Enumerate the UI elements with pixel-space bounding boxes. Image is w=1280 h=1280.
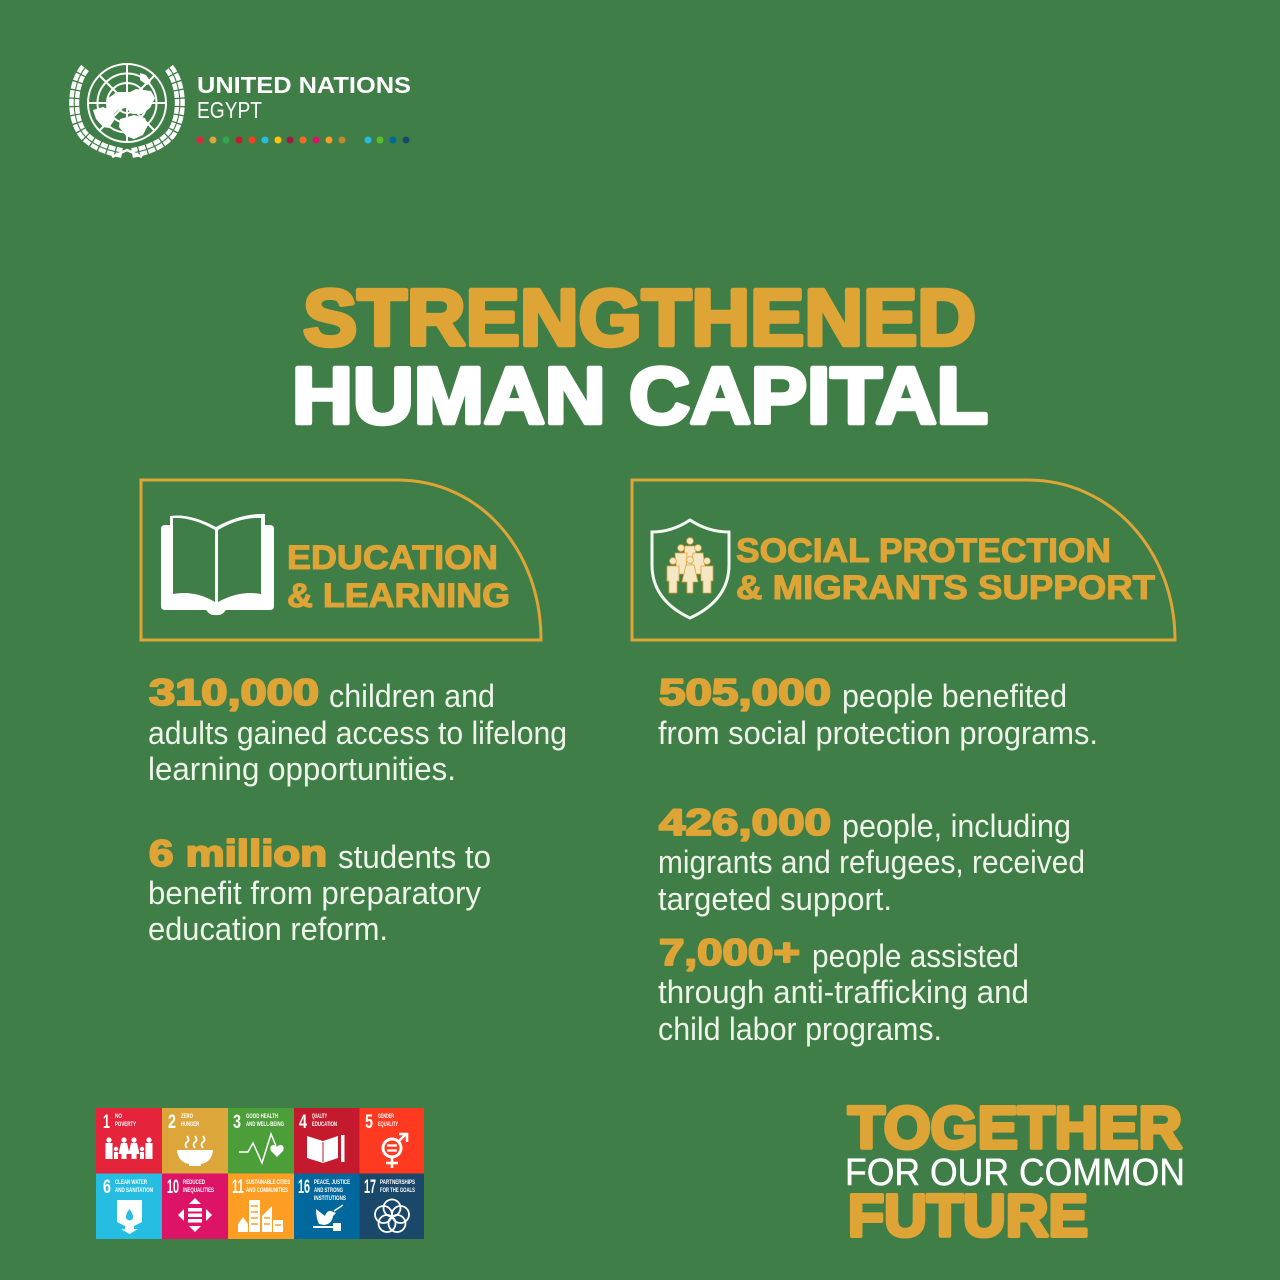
text block: 505,000 people: from social protection programs.: [658, 715, 1098, 751]
panel: education and learning header: [141, 480, 541, 640]
SDG tile 11: AND COMMUNITIES: [246, 1187, 288, 1194]
text block: 6 million students: education reform.: [148, 911, 388, 947]
slogan line: Together: TOGETHER: [848, 1095, 1182, 1161]
text block: 7,000+ people: child labor programs.: [658, 1011, 942, 1047]
SDG tile 5: GENDER: [378, 1113, 394, 1120]
UN Egypt logo: [74, 63, 411, 157]
SDG tile 16: [294, 1174, 360, 1239]
text block: 426,000 people: 426,000: [659, 802, 831, 843]
SDG tile 11: SUSTAINABLE CITIES: [246, 1179, 290, 1186]
SDG tile 5: 5: [365, 1112, 373, 1133]
SDG tile 17: PARTNERSHIPS: [380, 1179, 416, 1186]
text block: 310,000 learners: learning opportunities.: [148, 751, 456, 787]
SDG tile 1: NO: [115, 1113, 122, 1120]
slogan line: Future: FUTURE: [848, 1183, 1088, 1249]
text block: 310,000 learners: children and: [329, 678, 495, 714]
SDG tile 2: HUNGER: [181, 1121, 199, 1128]
SDG tile 1: 1: [103, 1112, 110, 1133]
SDG tile 10: [162, 1174, 228, 1239]
SDG tile 6: [96, 1174, 162, 1239]
text block: 7,000+ people: 7,000+: [659, 932, 800, 973]
logo wordmark: United Nations: UNITED NATIONS: [197, 72, 411, 98]
SDG tile 2: 2: [168, 1112, 176, 1133]
slogan line: For our common: FOR OUR COMMON: [845, 1152, 1185, 1194]
SDG tile 16: PEACE, JUSTICE: [314, 1179, 351, 1186]
SDG tile 2: [162, 1108, 228, 1174]
SDG tile 3: GOOD HEALTH: [246, 1113, 278, 1120]
SDG tile 1: [96, 1108, 162, 1174]
SDG tile 10: REDUCED: [183, 1179, 205, 1186]
SDG tile 16: 16: [298, 1177, 310, 1198]
slogan: Together for our common future: [845, 1095, 1185, 1249]
text block: 505,000 people: people benefited: [842, 678, 1067, 714]
logo wordmark: Egypt: EGYPT: [197, 97, 262, 123]
icon: shield with people: [652, 520, 729, 618]
SDG tile grid: [96, 1108, 424, 1239]
SDG tile 6: AND SANITATION: [115, 1187, 153, 1194]
panel: social protection header: [632, 480, 1175, 640]
text block: 6 million students: students to: [338, 839, 491, 875]
heading: Social Protection: SOCIAL PROTECTION: [736, 532, 1111, 570]
SDG tile 17: [360, 1174, 424, 1239]
text block: 6 million students: benefit from preparatory: [148, 875, 482, 911]
text block: 505,000 people: [658, 672, 1098, 751]
SDG tile 10: INEQUALITIES: [183, 1187, 215, 1194]
title line: Strengthened: STRENGTHENED: [303, 273, 976, 362]
text block: 310,000 learners: [148, 672, 567, 787]
SDG tile 5: EQUALITY: [378, 1121, 398, 1128]
text block: 7,000+ people: people assisted: [812, 938, 1019, 974]
text block: 6 million students: 6 million: [149, 833, 327, 874]
SDG tile 4: [294, 1108, 360, 1174]
text block: 310,000 learners: adults gained access to lifelong: [148, 715, 567, 751]
title line: Human Capital: HUMAN CAPITAL: [292, 351, 988, 440]
SDG tile 11: 11: [232, 1177, 244, 1198]
text block: 7,000+ people: [658, 932, 1029, 1047]
text block: 7,000+ people: through anti-trafficking and: [658, 974, 1029, 1010]
SDG tile 11: [228, 1174, 294, 1239]
SDG tile 5: [360, 1108, 424, 1174]
text block: 6 million students: [148, 833, 491, 947]
text block: 426,000 people: targeted support.: [658, 881, 892, 917]
SDG tile 17: FOR THE GOALS: [380, 1187, 415, 1194]
SDG tile 10: 10: [167, 1177, 179, 1198]
SDG tile 16: AND STRONG: [314, 1187, 343, 1194]
text block: 505,000 people: 505,000: [659, 672, 831, 713]
heading: and Migrants Support: & MIGRANTS SUPPORT: [736, 569, 1155, 607]
SDG tile 3: [228, 1108, 294, 1174]
icon: open book: [161, 514, 274, 615]
text block: 426,000 people: migrants and refugees, received: [658, 844, 1085, 880]
SDG tile 4: 4: [299, 1112, 307, 1133]
SDG tile 3: 3: [233, 1112, 241, 1133]
heading: and Learning: & LEARNING: [287, 577, 510, 615]
SDG tile 4: QUALITY: [312, 1113, 327, 1120]
title: [292, 273, 988, 440]
SDG tile 16: INSTITUTIONS: [314, 1195, 347, 1202]
text block: 310,000 learners: 310,000: [149, 672, 319, 713]
SDG tile 3: AND WELL-BEING: [246, 1121, 284, 1128]
text block: 426,000 people: people, including: [842, 808, 1071, 844]
SDG tile 6: CLEAN WATER: [115, 1179, 147, 1186]
icon: UN emblem: [74, 63, 180, 157]
SDG tile 17: 17: [364, 1177, 376, 1198]
SDG tile 2: ZERO: [181, 1113, 193, 1120]
heading: Education: EDUCATION: [287, 539, 498, 577]
SDG tile 1: POVERTY: [115, 1121, 137, 1128]
SDG tile 4: EDUCATION: [312, 1121, 337, 1128]
SDG tile 6: 6: [103, 1177, 111, 1198]
SDG colour dots: [196, 136, 410, 144]
text block: 426,000 people: [658, 802, 1085, 917]
